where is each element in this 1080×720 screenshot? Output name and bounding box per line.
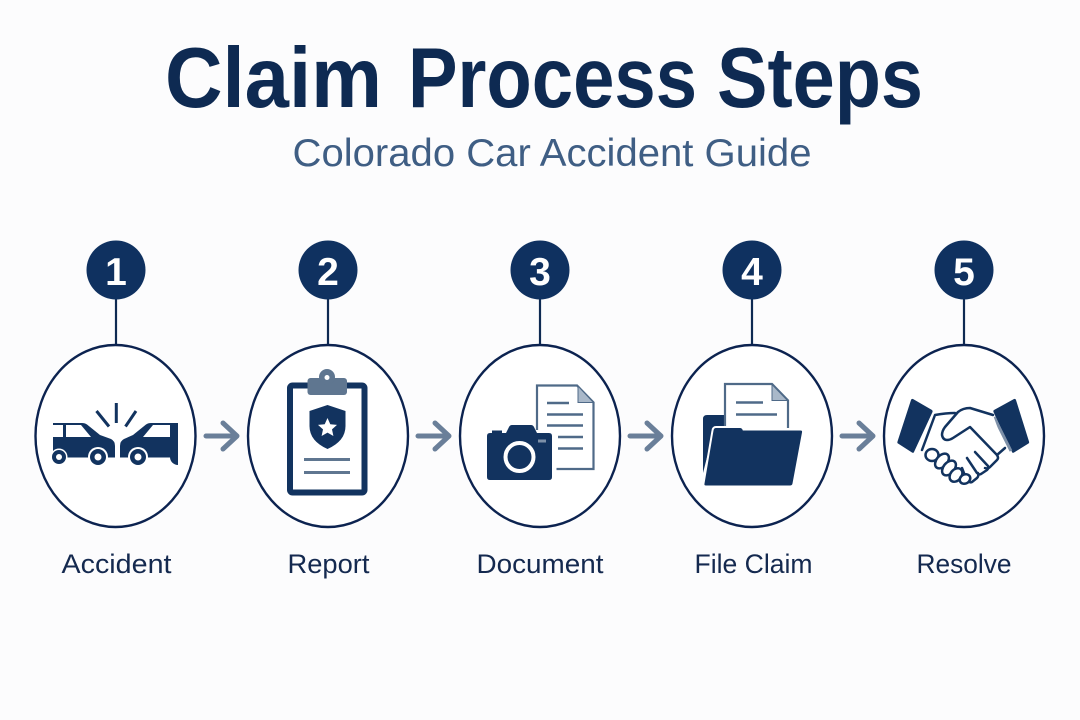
- icon: camera and document: [487, 386, 594, 480]
- step 1: accident: [36, 240, 196, 579]
- title: [165, 31, 923, 126]
- label: Report: Report: [288, 549, 370, 579]
- arrow 4 to 5: [842, 423, 873, 449]
- step circle 3: [460, 345, 620, 527]
- arrow 3 to 4: [630, 423, 661, 449]
- step 3: document: [460, 240, 620, 579]
- number badge 4: [722, 240, 782, 346]
- title: Process: [408, 31, 697, 126]
- step 4: file claim: [672, 240, 832, 579]
- step circle 2: [248, 345, 408, 527]
- number badge 5: [934, 240, 994, 346]
- label: File Claim: File Claim: [694, 549, 812, 579]
- number badge 1: [86, 240, 146, 346]
- step circle 1: [36, 345, 196, 527]
- number badge 3: [510, 240, 570, 346]
- title: Steps: [717, 31, 923, 126]
- number badge 5: 5: [953, 251, 975, 294]
- step circle 4: [672, 345, 832, 527]
- label: Accident: Accident: [62, 549, 172, 579]
- icon: handshake: [897, 399, 1029, 486]
- label: Document: Document: [476, 549, 604, 579]
- step 5: resolve: [884, 240, 1044, 579]
- number badge 2: [298, 240, 358, 346]
- number badge 2: 2: [317, 251, 339, 294]
- icon: clipboard with police shield: [290, 369, 364, 492]
- title: Claim: [165, 31, 382, 126]
- number badge 3: 3: [529, 251, 551, 294]
- step 2: report: [248, 240, 408, 579]
- label: Resolve: Resolve: [916, 549, 1012, 579]
- subtitle: Colorado Car Accident Guide: [292, 132, 812, 175]
- arrow 1 to 2: [206, 423, 237, 449]
- icon: folder with document: [703, 384, 803, 486]
- arrow 2 to 3: [418, 423, 449, 449]
- step circle 5: [884, 345, 1044, 527]
- number badge 4: 4: [741, 251, 763, 294]
- icon: two colliding cars: [50, 403, 178, 467]
- number badge 1: 1: [105, 251, 127, 294]
